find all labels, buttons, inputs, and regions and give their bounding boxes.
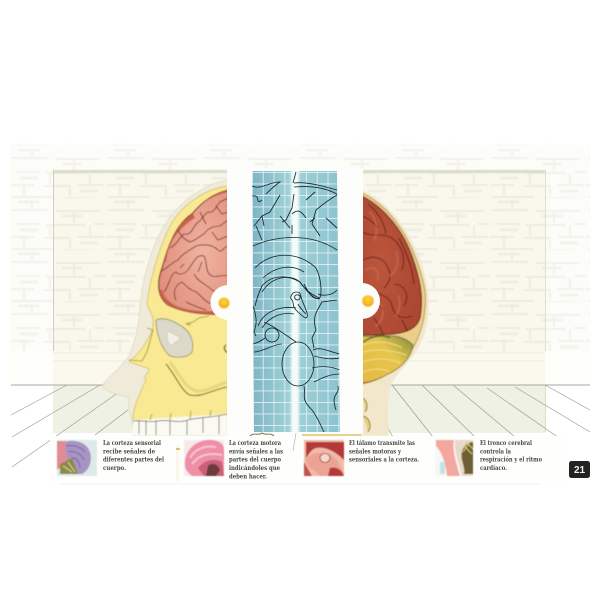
caption 3: thalamus	[304, 439, 419, 476]
text: thalamus: sensoriales a la corteza.	[349, 456, 419, 464]
caption 2: motor cortex	[184, 439, 283, 480]
text: sensory cortex: La corteza sensorial	[103, 439, 161, 447]
thumbnail: motor cortex	[184, 440, 224, 476]
notch: left dot	[210, 285, 230, 320]
text: thalamus: señales motoras y	[349, 447, 401, 455]
illustration: left half of head	[103, 180, 228, 436]
text: motor cortex: La corteza motora	[229, 439, 281, 447]
page number: 21	[574, 465, 585, 476]
text: sensory cortex: cuerpo.	[103, 464, 126, 472]
text: thalamus	[349, 439, 419, 464]
blue window with brain section line drawing	[250, 170, 342, 434]
cerebellum	[362, 336, 413, 383]
text: motor cortex: deben hacer.	[229, 472, 267, 480]
caption 4: brain stem	[435, 439, 542, 476]
text: thalamus: El tálamo transmite las	[349, 439, 415, 447]
text: motor cortex: indicándoles que	[229, 464, 280, 472]
thumbnail: thalamus	[304, 440, 344, 476]
text: sensory cortex: diferentes partes del	[103, 456, 164, 464]
skull right	[362, 193, 425, 384]
thumbnail: sensory cortex	[57, 440, 97, 476]
text: brain stem: El tronco cerebral	[480, 439, 532, 447]
thumbnail: brain stem	[435, 440, 473, 476]
teeth	[132, 414, 227, 436]
eye socket	[156, 319, 193, 357]
illustration: right half of head	[362, 190, 428, 436]
text: brain stem	[480, 439, 542, 472]
brain right	[362, 196, 422, 335]
floor with planks	[10, 351, 590, 467]
text: sensory cortex	[103, 439, 164, 472]
text: brain stem: controla la	[480, 447, 511, 455]
text: motor cortex: envía señales a las	[229, 447, 283, 455]
skull	[129, 186, 228, 436]
page number	[569, 461, 590, 478]
suture	[186, 316, 209, 325]
skin silhouette right	[362, 190, 428, 436]
neck vertebra	[363, 398, 370, 432]
caption band	[50, 433, 562, 485]
text: brain stem: respiración y el ritmo	[480, 456, 542, 464]
skin silhouette	[103, 180, 228, 436]
cheekbone line	[170, 362, 228, 391]
text: motor cortex: partes del cuerpo	[229, 456, 281, 464]
caption 1: sensory cortex	[57, 439, 164, 476]
text: sensory cortex: recibe señales de	[103, 447, 155, 455]
white sliding frame	[227, 168, 363, 436]
text: motor cortex	[229, 439, 283, 480]
nasal bone suture	[129, 328, 153, 361]
text: brain stem: cardíaco.	[480, 464, 507, 472]
notch: right dot	[362, 283, 380, 319]
brain left	[159, 190, 228, 314]
background wall panel	[0, 140, 600, 432]
